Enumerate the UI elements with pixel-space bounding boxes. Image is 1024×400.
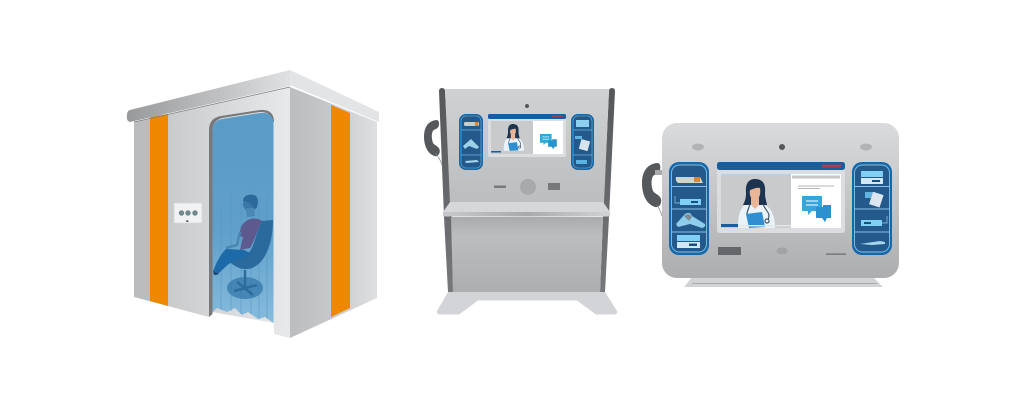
standing kiosk [424,88,617,314]
icon: pulse oximeter card [865,192,884,208]
icon: thermometer device [676,177,703,183]
desktop kiosk [642,123,899,287]
desktop kiosk handset [642,163,663,216]
desktop kiosk doctor [738,179,775,228]
booth orange stripe right [331,105,350,317]
desktop kiosk left device panel [669,162,709,255]
icon: digital thermometer [860,241,885,245]
standing kiosk left device panel [459,114,483,170]
icon: stacked monitor [677,235,700,248]
booth front wall [134,87,290,338]
icon: blood pressure monitor [675,196,701,205]
standing kiosk shelf [443,202,610,216]
standing kiosk posts [439,88,615,292]
standing kiosk handset [424,120,442,165]
booth door with curtain [209,110,274,323]
desktop kiosk right device panel [852,162,892,255]
desktop kiosk chat bubbles [802,196,831,222]
booth orange stripe left [150,114,168,306]
desktop kiosk camera [779,144,785,150]
standing kiosk lower panel [451,217,603,292]
seated person on chair [213,195,273,299]
standing kiosk knob and slots [494,179,560,195]
desktop kiosk stand [684,277,883,287]
icon: scanner [676,213,705,228]
booth control panel [174,203,202,223]
booth roof [127,70,379,122]
standing kiosk chat bubbles [540,134,557,149]
standing kiosk right device panel [571,114,594,170]
standing kiosk screen [488,114,566,157]
desktop kiosk slots [718,247,846,255]
standing kiosk camera [525,104,529,108]
desktop kiosk screen [717,162,845,233]
icon: stacked monitor [861,171,883,184]
standing kiosk base [437,292,617,314]
desktop kiosk body [662,123,899,278]
standing kiosk upper panel [445,89,609,203]
desktop kiosk speakers [692,144,872,254]
booth [127,70,379,338]
icon: blood pressure monitor [861,216,887,226]
booth right wall [290,87,377,338]
standing kiosk doctor [504,124,524,151]
